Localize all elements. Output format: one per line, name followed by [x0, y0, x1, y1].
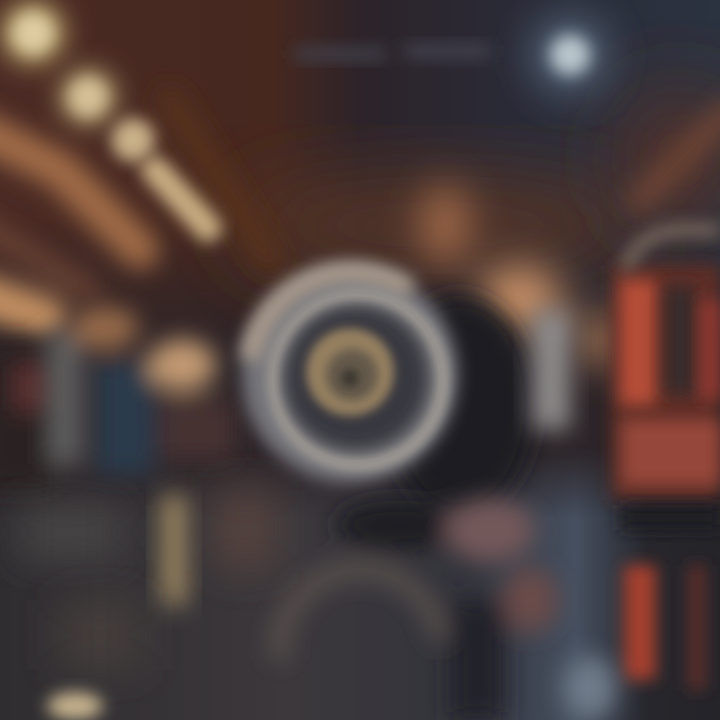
pale column beside sphere [532, 310, 570, 430]
right red machine [612, 230, 720, 530]
lower right red strip [624, 565, 706, 690]
dark sphere [385, 295, 535, 515]
concentric wheel [242, 267, 458, 483]
ceiling lights [0, 0, 208, 228]
warm diagonal ceiling bands [0, 100, 720, 318]
warm glow behind machine [421, 185, 622, 368]
left machines [0, 306, 235, 490]
floor reflections [20, 490, 616, 720]
lower machine base [279, 498, 558, 720]
top right light [530, 15, 610, 95]
faint top sign [295, 44, 490, 60]
